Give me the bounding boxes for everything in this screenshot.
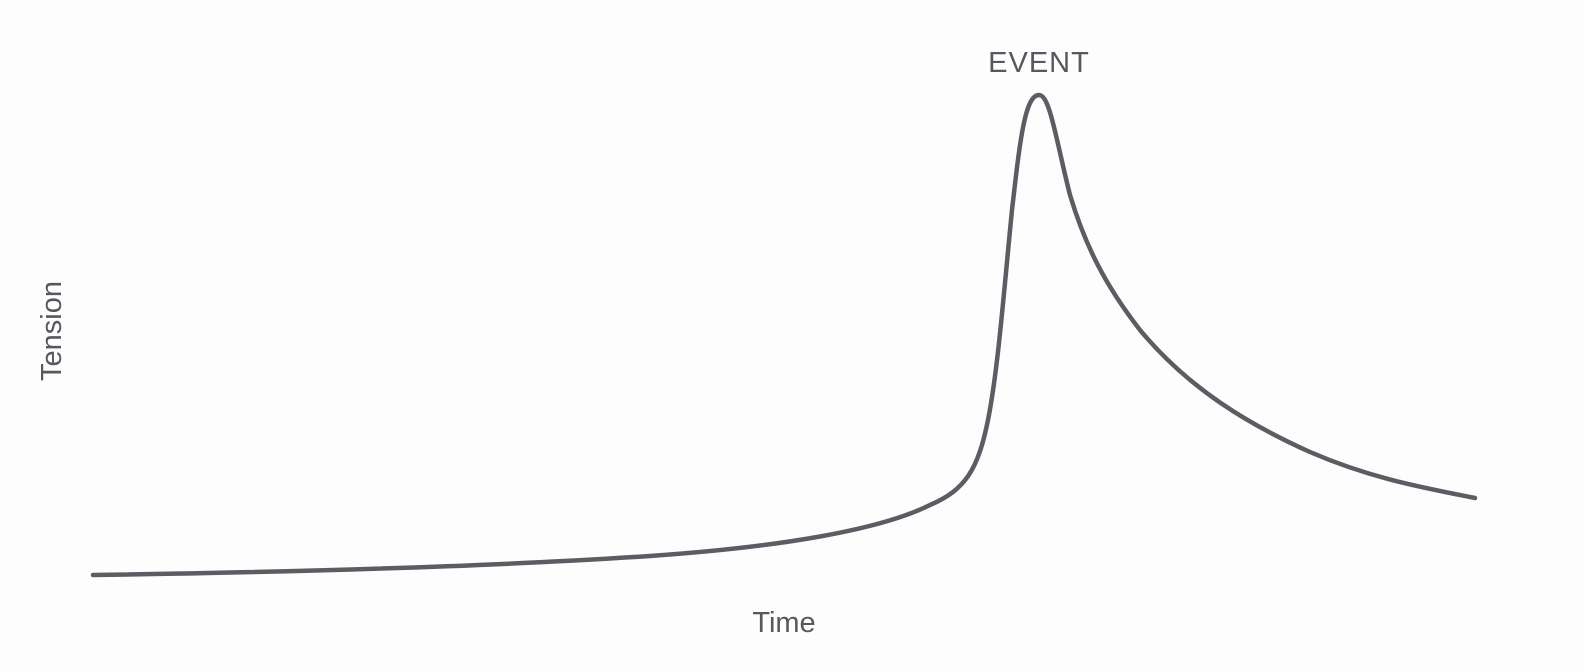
tension curve [93,95,1475,575]
x-axis label: Time: Time [752,607,816,639]
y-axis label: Tension: Tension [36,281,68,381]
label: EVENT: EVENT [988,47,1090,79]
